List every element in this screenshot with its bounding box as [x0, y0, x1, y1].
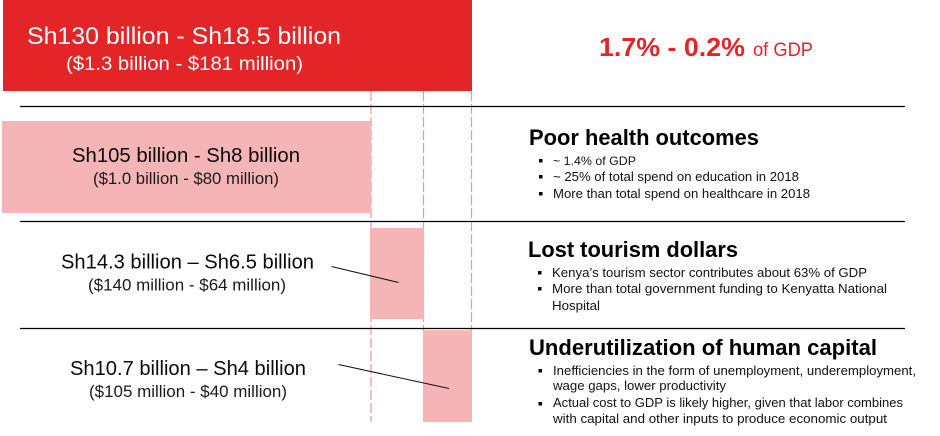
poor health cost in dollars: ($1.0 billion - $80 million): [93, 170, 279, 188]
heading: underutilization of human capital: Underutilization of human capital: [529, 335, 877, 360]
panel: underutilization text: [529, 335, 916, 426]
bar: underutilization cost: [423, 331, 472, 422]
bullet list: tourism: [538, 266, 887, 313]
bullet list: tourism: Kenya’s tourism sector contributes about 63% of GDP: [552, 266, 867, 280]
bullet list: underutilization: Actual cost to GDP is likely higher, given that labor combines: [553, 396, 903, 410]
total cost in dollars: ($1.3 billion - $181 million): [66, 54, 303, 75]
bar: lost tourism cost: [370, 228, 424, 319]
heading: lost tourism dollars: Lost tourism dollars: [528, 237, 738, 262]
leader line: underutilization label to bar: [338, 364, 449, 388]
panel: underutilization cost label: [70, 358, 306, 401]
panel: poor health outcomes text: [529, 125, 810, 201]
total cost in shillings: Sh130 billion - Sh18.5 billion: [27, 23, 341, 50]
panel: lost tourism text: [528, 237, 887, 313]
share of GDP callout: of GDP: [753, 39, 813, 61]
bullet list: underutilization: with capital and other inputs to produce economic output: [552, 412, 888, 426]
heading: poor health outcomes: Poor health outcomes: [529, 125, 759, 150]
leader line: tourism label to bar: [332, 266, 398, 282]
bullet list: poor health: ~ 1.4% of GDP: [553, 154, 636, 168]
panel: lost tourism cost label: ($140 million - $64 million): [88, 276, 286, 294]
panel: poor health cost bar: [2, 121, 371, 213]
panel: total cost red bar: [3, 0, 472, 91]
poor health cost in shillings: Sh105 billion - Sh8 billion: [72, 145, 300, 167]
panel: underutilization cost label: ($105 million - $40 million): [89, 383, 287, 401]
panel: lost tourism cost label: [61, 252, 314, 294]
bullet list: tourism: Hospital: [552, 299, 600, 313]
panel: lost tourism cost label: Sh14.3 billion – Sh6.5 billion: [61, 252, 314, 274]
bullet list: underutilization: wage gaps, lower productivity: [552, 379, 727, 393]
bullet list: poor health: ~ 25% of total spend on education in 2018: [553, 170, 799, 184]
share of GDP callout: 1.7% - 0.2%: [599, 32, 745, 62]
bullet list: poor health: More than total spend on healthcare in 2018: [553, 187, 810, 201]
panel: underutilization cost label: Sh10.7 billion – Sh4 billion: [70, 358, 306, 380]
bullet list: underutilization: [538, 364, 916, 426]
bullet list: underutilization: Inefficiencies in the form of unemployment, underemployment,: [553, 364, 916, 378]
bullet list: tourism: More than total government funding to Kenyatta National: [552, 282, 887, 296]
bullet list: poor health: [539, 154, 810, 201]
